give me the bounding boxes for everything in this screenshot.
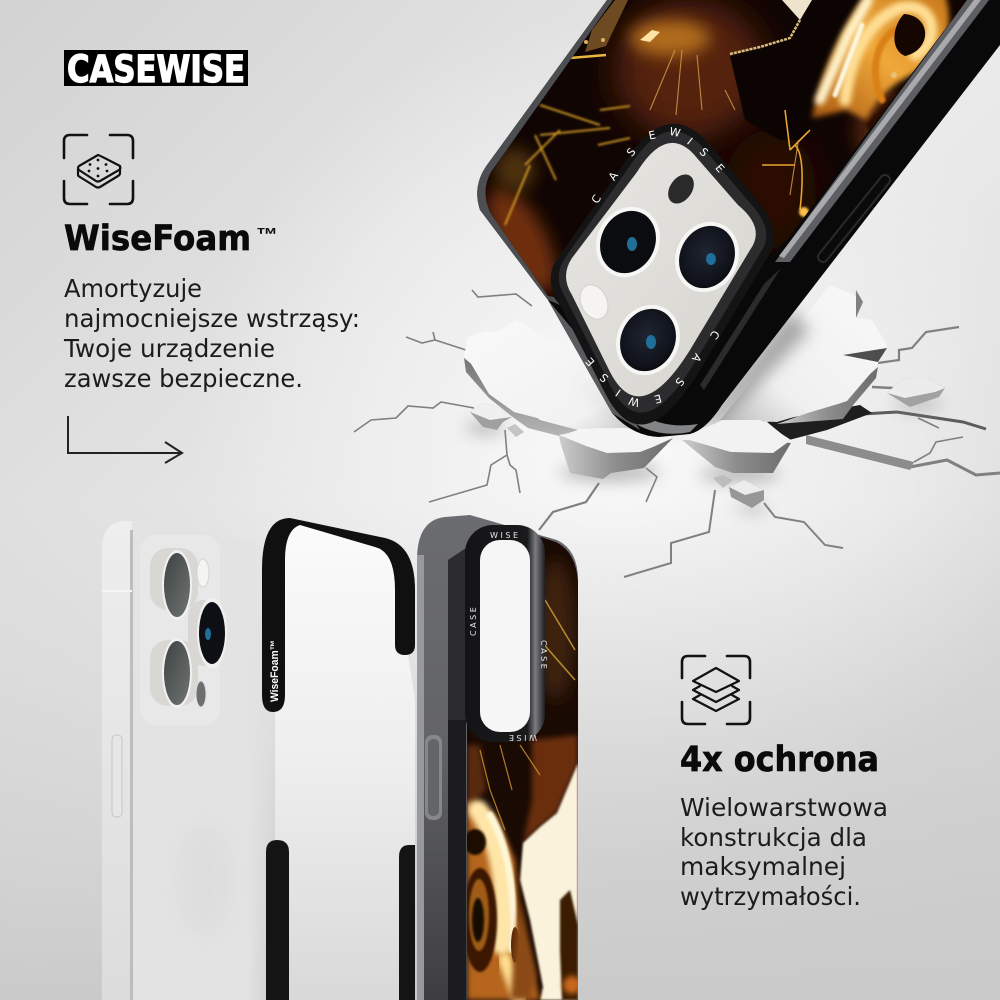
side button <box>425 735 442 820</box>
camera ring: W I S E <box>490 531 518 540</box>
lens bottom <box>162 638 192 708</box>
camera ring: C A S E <box>539 640 548 669</box>
flame <box>467 800 540 1000</box>
lens top <box>162 550 192 620</box>
ring lettering: S <box>597 370 611 385</box>
metal side band <box>775 0 989 262</box>
foam strip label: WiseFoam™ <box>269 640 281 702</box>
lens right <box>197 598 227 668</box>
lens 2 <box>664 211 750 303</box>
phone case: side view with artwork <box>417 515 581 1000</box>
ring lettering <box>583 125 727 409</box>
bottom right plate <box>682 420 791 473</box>
cracked wall <box>354 285 1000 577</box>
phone: top tilted with case <box>470 0 1000 437</box>
text block: 4x ochrona description: konstrukcja dla <box>680 823 867 852</box>
ring lettering: S <box>697 145 711 159</box>
ring lettering: E <box>653 391 663 406</box>
bottom left plate <box>559 428 673 479</box>
bottom corner glare <box>620 410 698 434</box>
ring lettering: W <box>627 394 641 409</box>
wedge <box>806 435 914 470</box>
ring lettering: S <box>672 375 687 389</box>
eye <box>640 30 660 42</box>
ring lettering: I <box>613 386 623 399</box>
side button <box>112 735 122 817</box>
left plate <box>464 320 655 436</box>
camera ring: W I S E <box>509 733 537 742</box>
camera ring: C A S E <box>469 607 478 636</box>
bright sky <box>520 763 578 1000</box>
WiseFoam insert <box>262 518 415 1000</box>
side button <box>823 180 885 257</box>
dark swirl <box>463 868 497 972</box>
foam strip: lower left <box>266 840 289 1000</box>
heading: WiseFoam: WiseFoam <box>64 219 251 259</box>
hairline cracks <box>354 290 1000 577</box>
silhouette <box>560 890 578 1000</box>
camera island <box>551 124 774 425</box>
mic cutout <box>663 170 699 208</box>
ring lettering: A <box>606 169 621 183</box>
flash and mic <box>196 559 209 707</box>
ring lettering: C <box>589 192 604 206</box>
text block: 4x ochrona description: wytrzymałości. <box>680 882 861 911</box>
left rim <box>477 0 613 305</box>
case body <box>477 0 1000 437</box>
camera plateau <box>140 535 220 725</box>
rock debris <box>470 377 945 508</box>
text block: WiseFoam description: Twoje urządzenie <box>63 334 275 363</box>
ring lettering: E <box>647 128 657 143</box>
ring lettering: E <box>583 355 598 369</box>
printed artwork <box>486 0 956 297</box>
text block: 4x ochrona description: Wielowarstwowa <box>680 793 888 822</box>
flame swirl <box>812 0 949 120</box>
foam strip: lower right <box>399 845 415 1000</box>
phone contact shadow <box>575 310 810 432</box>
dark hole <box>767 405 872 440</box>
text block: 4x ochrona description <box>680 793 888 911</box>
heading: 4x ochrona: 4x ochrona <box>680 740 879 780</box>
ring lettering: C <box>707 328 722 342</box>
soft shadows <box>465 399 942 512</box>
flash <box>575 280 613 324</box>
icon: foam pad <box>64 135 133 204</box>
right plate <box>720 285 887 424</box>
text block: WiseFoam description: najmocniejsze wstrząsy: <box>64 304 360 333</box>
text block: WiseFoam description: zawsze bezpieczne. <box>64 364 303 393</box>
ring lettering: A <box>689 351 704 365</box>
heading: WiseFoam: ™ <box>256 225 278 246</box>
dark armor <box>730 41 812 140</box>
artwork <box>463 530 581 1000</box>
text block: WiseFoam description <box>63 274 360 393</box>
phone: white back view <box>102 521 273 1000</box>
text block: 4x ochrona description: maksymalnej <box>680 852 846 881</box>
lens 1 <box>585 196 671 288</box>
icon: layers <box>682 656 750 724</box>
gold leaves <box>505 105 630 225</box>
foam strip: top <box>262 518 415 712</box>
arrow <box>68 416 182 463</box>
ring lettering: S <box>624 145 639 159</box>
helmet <box>585 0 628 52</box>
ring lettering: E <box>712 161 727 175</box>
logo: CASEWISE: CASEWISE <box>67 48 245 91</box>
lens 3 <box>605 294 691 386</box>
brown hair <box>523 735 578 843</box>
camera ring <box>465 525 548 742</box>
text block: WiseFoam description: Amortyzuje <box>64 274 202 303</box>
ring lettering: W <box>668 125 682 140</box>
ring lettering: I <box>684 135 695 148</box>
